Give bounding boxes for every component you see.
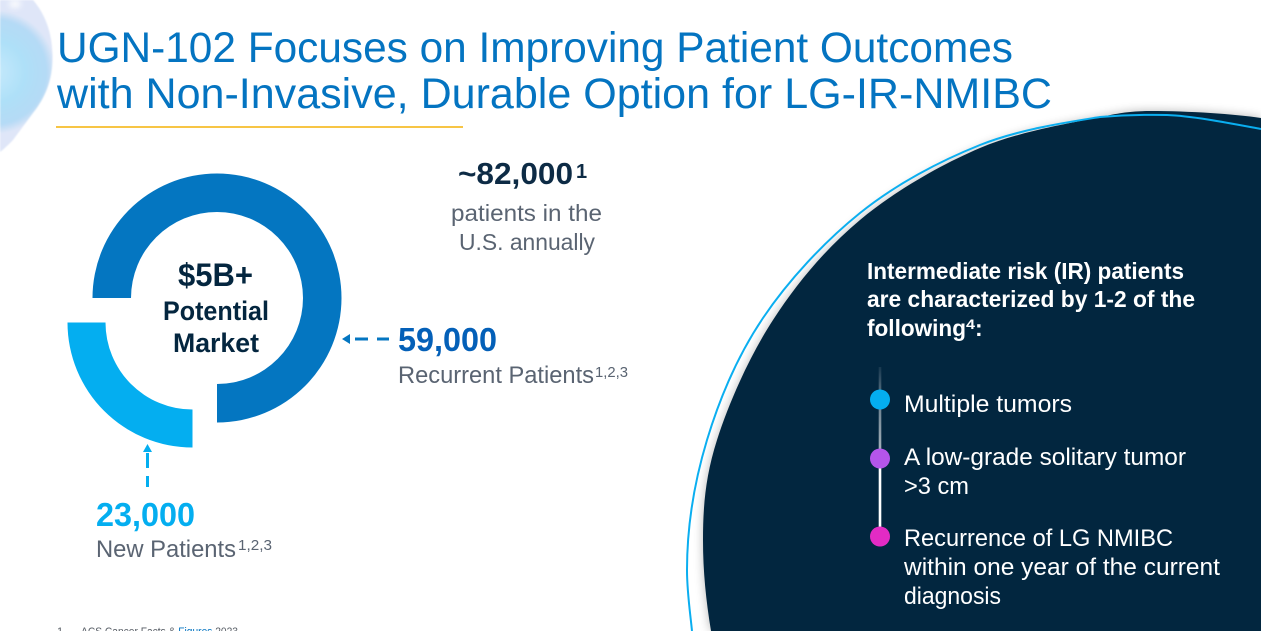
stat: total patients annually: 1 xyxy=(576,161,587,183)
stat: total patients annually: ~82,000 xyxy=(458,156,573,191)
timeline line xyxy=(879,367,881,537)
stat: recurrent patients: 59,000 xyxy=(398,321,497,358)
donut segment: recurrent patients xyxy=(92,174,342,422)
criterion: low-grade solitary tumor: A low-grade solitary tumor xyxy=(904,444,1186,471)
stat: recurrent patients: Recurrent Patients xyxy=(398,362,594,389)
panel heading: 4 xyxy=(966,316,975,332)
title: UGN-102 Focuses on Improving Patient Outcomes xyxy=(57,24,1013,72)
stat: recurrent patients: 1,2,3 xyxy=(595,364,628,381)
panel heading: are characterized by 1-2 of the xyxy=(867,286,1195,312)
donut center label: $5B+ xyxy=(178,257,253,293)
criterion: recurrence: within one year of the current xyxy=(903,554,1220,581)
arrow: recurrent patients xyxy=(342,334,389,344)
panel heading: Intermediate risk (IR) patients xyxy=(867,258,1184,284)
stat: total patients annually xyxy=(451,156,602,255)
criterion: low-grade solitary tumor: >3 cm xyxy=(904,473,969,500)
donut center label: Market xyxy=(173,328,259,358)
stat: new patients: 23,000 xyxy=(96,496,195,533)
donut center label xyxy=(163,257,269,358)
stat: new patients: New Patients xyxy=(96,536,236,563)
panel shadow xyxy=(703,111,1261,631)
stat: total patients annually: U.S. annually xyxy=(459,229,595,255)
stat: total patients annually: patients in the xyxy=(451,200,602,226)
stat: recurrent patients xyxy=(398,321,628,389)
title: with Non-Invasive, Durable Option for LG-IR-NMIBC xyxy=(56,70,1052,118)
panel accent arc xyxy=(687,115,1261,631)
panel heading xyxy=(867,258,1195,341)
stat: new patients: 1,2,3 xyxy=(238,537,272,554)
donut center label: Potential xyxy=(163,296,269,326)
decorative water bubble xyxy=(0,0,53,152)
criterion: multiple tumors: Multiple tumors xyxy=(904,391,1072,418)
criterion: low-grade solitary tumor xyxy=(870,444,1186,500)
panel heading: : xyxy=(975,315,983,341)
stat: new patients xyxy=(96,496,272,563)
panel background xyxy=(703,111,1261,631)
panel: intermediate risk criteria xyxy=(687,111,1261,631)
donut segment: new patients xyxy=(68,322,192,448)
title underline xyxy=(56,126,463,128)
donut chart xyxy=(68,174,342,448)
title xyxy=(56,24,1052,118)
criterion: recurrence xyxy=(870,525,1220,610)
arrow: new patients xyxy=(143,444,152,487)
criterion: recurrence: Recurrence of LG NMIBC xyxy=(904,525,1173,552)
criterion: recurrence: diagnosis xyxy=(904,583,1001,610)
panel heading: following xyxy=(867,315,966,341)
